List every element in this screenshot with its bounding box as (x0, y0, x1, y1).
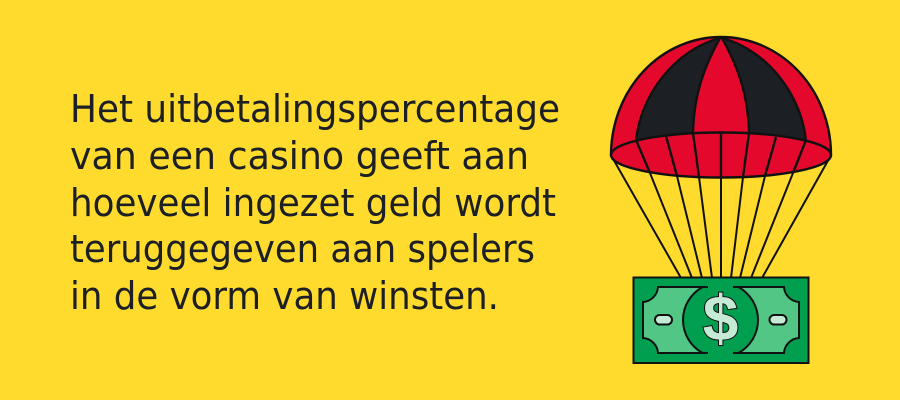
text block: payout explanation: hoeveel ingezet geld wordt (70, 181, 556, 225)
icon: parachute with banknote (611, 37, 831, 363)
text block: payout explanation: Het uitbetalingspercentage (70, 87, 560, 131)
dollar sign: $ (703, 282, 738, 354)
text block: payout explanation (70, 87, 560, 318)
text block: payout explanation: in de vorm van winsten. (70, 274, 499, 318)
text block: payout explanation: van een casino geeft aan (70, 134, 529, 178)
text block: payout explanation: teruggegeven aan spelers (70, 227, 535, 271)
parachute canopy (611, 37, 831, 178)
parachute cords (612, 157, 830, 278)
banknote (634, 278, 808, 363)
